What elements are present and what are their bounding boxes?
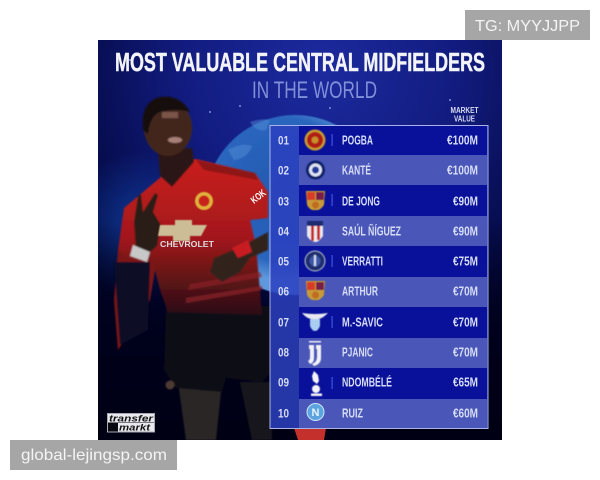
watermark: website [10, 440, 177, 470]
player boot [294, 428, 326, 440]
column heading: market value: VALUE [454, 114, 476, 124]
row 01: €100M [447, 134, 478, 148]
row 08 [278, 338, 487, 368]
row 06 [278, 277, 487, 307]
row 04 [278, 216, 487, 246]
row 05: 05 [278, 254, 289, 268]
row 01: 01 [278, 134, 289, 148]
row 07: M.-SAVIC [342, 316, 383, 330]
row 09: 09 [278, 376, 289, 390]
sleeve patch: KOK [249, 188, 269, 206]
player right forearm [210, 232, 268, 282]
column heading: market value [450, 106, 479, 124]
row 02: KANTÉ [342, 162, 371, 178]
heading: subtitle: IN THE WORLD [252, 77, 377, 104]
icon: globe [214, 114, 338, 295]
icon: atletico crest [307, 221, 323, 242]
player legs [178, 382, 222, 440]
player head [144, 109, 193, 156]
row 03: DE JONG [342, 194, 380, 208]
row 07: 07 [278, 316, 289, 330]
icon: barcelona crest [306, 281, 325, 300]
player shorts [164, 306, 272, 392]
player raised hand [134, 193, 161, 252]
player jersey [118, 159, 268, 315]
icon: napoli crest [307, 404, 324, 420]
column heading: market value: MARKET [450, 106, 479, 115]
row 03 [278, 185, 487, 216]
row 08: PJANIC [342, 346, 373, 360]
row 05: €75M [453, 254, 478, 268]
row 09 [278, 368, 487, 399]
row 10 [278, 399, 487, 428]
row 10: 10 [278, 406, 289, 420]
row 07: €70M [453, 316, 478, 330]
watermark: telegram handle: TG: MYYJJPP [475, 18, 580, 35]
icon: juventus crest [308, 341, 321, 366]
icon: napoli crest: N [312, 407, 320, 419]
watermark: telegram handle [465, 10, 590, 40]
row 01: POGBA [342, 134, 373, 148]
row 04: €90M [453, 224, 478, 238]
icon: manchester united crest [304, 130, 326, 150]
row 10: RUIZ [342, 406, 363, 420]
logo: transfermarkt: transfer [109, 414, 154, 424]
row 04: 04 [278, 224, 289, 238]
watermark: website: global-lejingsp.com [21, 447, 167, 464]
row 06: ARTHUR [342, 284, 378, 298]
row 04: SAÚL ÑÍGUEZ [342, 224, 401, 238]
row 09: €65M [453, 376, 478, 390]
row 08: 08 [278, 346, 289, 360]
row 09: NDOMBÉLÉ [342, 374, 392, 390]
jersey crest [195, 192, 213, 210]
row 02: €100M [447, 164, 478, 178]
panel: poster background [98, 40, 502, 440]
row 08: €70M [453, 346, 478, 360]
player neck [158, 148, 194, 187]
icon: chelsea crest [306, 160, 325, 180]
row 02: 02 [278, 164, 289, 178]
icon: lazio crest [302, 313, 328, 331]
jersey sponsor chevrolet [158, 220, 214, 249]
row 07 [278, 307, 487, 338]
row 06: €70M [453, 284, 478, 298]
row 01 [278, 126, 487, 155]
row 05 [278, 246, 487, 277]
panel: ranking table [270, 126, 488, 428]
figure: player [114, 97, 326, 440]
jersey sponsor chevrolet: CHEVROLET [160, 240, 214, 249]
logo: transfermarkt: markt [119, 422, 151, 432]
row 05: VERRATTI [342, 254, 383, 268]
icon: barcelona crest [306, 191, 325, 210]
row 03: €90M [453, 194, 478, 208]
logo: transfermarkt [108, 414, 154, 432]
row 06: 06 [278, 284, 289, 298]
icon: tottenham crest [311, 371, 322, 396]
row 10: €60M [453, 406, 478, 420]
icon: psg crest [305, 251, 325, 271]
player left arm [113, 250, 156, 350]
row 02 [278, 155, 487, 185]
row 03: 03 [278, 194, 289, 208]
